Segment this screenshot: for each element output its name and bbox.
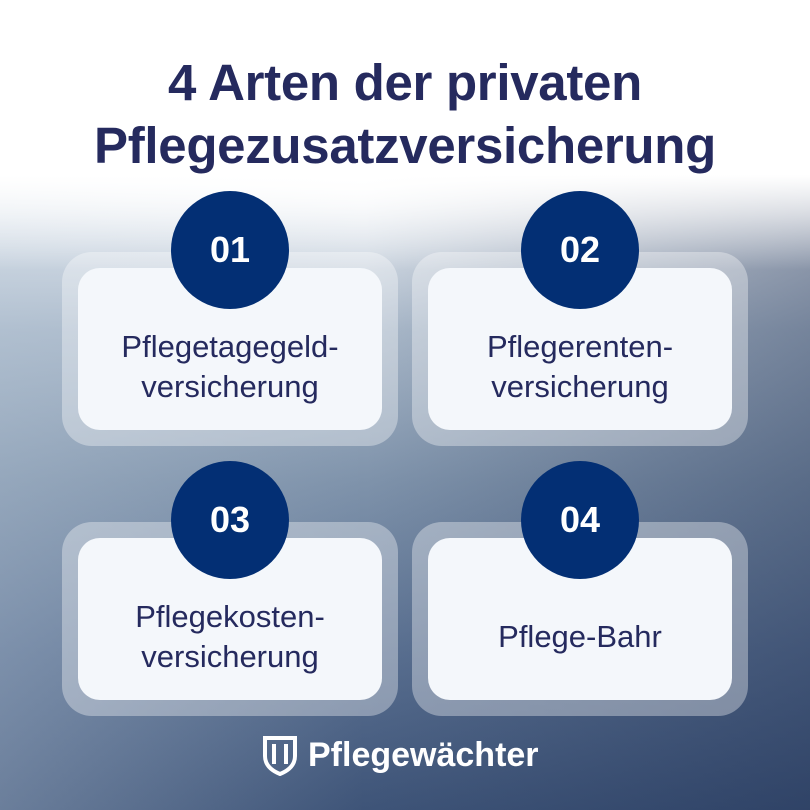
- title: [94, 54, 716, 174]
- card 02: versicherung: [491, 369, 669, 404]
- badge 04: [521, 461, 639, 579]
- card 02: [412, 252, 748, 446]
- title: Pflegezusatzversicherung: [94, 117, 716, 174]
- card 03: [62, 522, 398, 716]
- card 03: Pflegekosten-: [135, 599, 325, 634]
- card 02: Pflegerenten-: [487, 329, 673, 364]
- card 01: [62, 252, 398, 446]
- badge 01: [171, 191, 289, 309]
- icon: shield: [263, 736, 297, 776]
- badge 03: 03: [210, 499, 250, 540]
- card 04: [412, 522, 748, 716]
- card 01: versicherung: [141, 369, 319, 404]
- card 04: Pflege-Bahr: [498, 619, 662, 654]
- badge 02: [521, 191, 639, 309]
- logo: Pflegewächter: [308, 736, 539, 774]
- title: 4 Arten der privaten: [168, 54, 642, 111]
- badge 02: 02: [560, 229, 600, 270]
- badge 04: 04: [560, 499, 600, 540]
- card 01: Pflegetagegeld-: [121, 329, 339, 364]
- badge 01: 01: [210, 229, 250, 270]
- badge 03: [171, 461, 289, 579]
- card 03: versicherung: [141, 639, 319, 674]
